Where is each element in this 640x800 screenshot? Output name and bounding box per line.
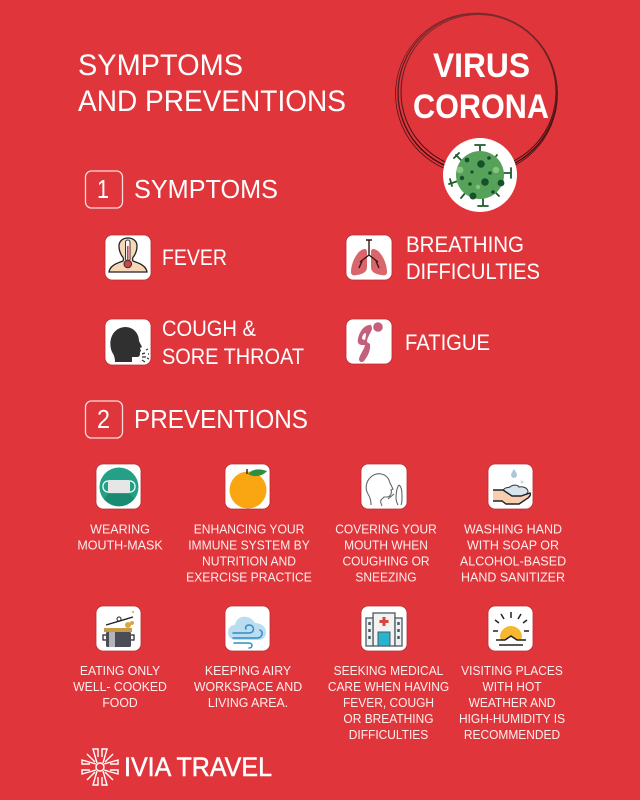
prevention: wash hands: ALCOHOL-BASED bbox=[460, 553, 566, 569]
symptom: fatigue: FATIGUE bbox=[405, 330, 490, 355]
prevention: hot weather: HIGH-HUMIDITY IS bbox=[459, 711, 565, 726]
prevention: hot weather bbox=[459, 606, 565, 742]
title: SYMPTOMS bbox=[78, 49, 243, 82]
symptom: fatigue bbox=[346, 319, 490, 364]
prevention: airy workspace: KEEPING AIRY bbox=[205, 663, 292, 678]
prevention: immune system: NUTRITION AND bbox=[202, 553, 296, 569]
prevention: hot weather: WITH HOT bbox=[482, 679, 542, 694]
prevention: medical care: FEVER, COUGH bbox=[343, 695, 434, 710]
prevention: medical care: SEEKING MEDICAL bbox=[334, 663, 443, 678]
prevention: wash hands bbox=[460, 464, 566, 585]
title bbox=[78, 49, 346, 118]
heading: symptoms: 1 bbox=[97, 174, 109, 204]
icon: washing hands bbox=[488, 464, 533, 509]
badge: virus corona bbox=[396, 13, 558, 212]
symptom: cough and sore throat bbox=[105, 316, 304, 369]
prevention: airy workspace: LIVING AREA. bbox=[208, 695, 288, 710]
icon: sunrise bbox=[488, 606, 533, 651]
prevention: immune system: ENHANCING YOUR bbox=[194, 521, 304, 537]
icon: covering mouth bbox=[361, 464, 407, 509]
prevention: hot weather: VISITING PLACES bbox=[461, 663, 563, 678]
prevention: airy workspace bbox=[194, 606, 302, 710]
symptom: fever: FEVER bbox=[162, 245, 227, 270]
icon: logo flower bbox=[82, 749, 118, 785]
symptom: cough and sore throat: SORE THROAT bbox=[162, 344, 304, 369]
prevention: mouth mask: MOUTH-MASK bbox=[77, 537, 163, 553]
prevention: medical care: CARE WHEN HAVING bbox=[328, 679, 449, 694]
icon: wind cloud bbox=[225, 606, 270, 651]
icon: lungs bbox=[346, 235, 392, 280]
icon: mask bbox=[96, 464, 141, 509]
heading: symptoms: SYMPTOMS bbox=[134, 174, 278, 204]
heading: preventions bbox=[86, 401, 308, 438]
icon: orange bbox=[225, 464, 270, 509]
prevention: wash hands: HAND SANITIZER bbox=[461, 569, 565, 585]
prevention: mouth mask bbox=[77, 464, 163, 553]
prevention: mouth mask: WEARING bbox=[90, 521, 150, 537]
prevention: wash hands: WITH SOAP OR bbox=[467, 537, 559, 553]
heading: preventions: PREVENTIONS bbox=[134, 404, 308, 434]
prevention: medical care bbox=[328, 606, 449, 742]
prevention: airy workspace: WORKSPACE AND bbox=[194, 679, 302, 694]
badge: virus corona: CORONA bbox=[413, 88, 549, 126]
logo: ivia travel: IVIA TRAVEL bbox=[124, 752, 272, 782]
icon: cough bbox=[105, 319, 151, 365]
icon: fatigue bbox=[346, 319, 392, 364]
icon: hospital bbox=[361, 606, 407, 651]
prevention: immune system: EXERCISE PRACTICE bbox=[186, 569, 312, 585]
symptom: breathing difficulties: BREATHING bbox=[406, 232, 524, 257]
prevention: hot weather: RECOMMENDED bbox=[464, 727, 560, 742]
symptom: breathing difficulties bbox=[346, 232, 540, 284]
symptom: cough and sore throat: COUGH & bbox=[162, 316, 256, 341]
badge: virus corona: VIRUS bbox=[433, 47, 530, 85]
prevention: immune system: IMMUNE SYSTEM BY bbox=[188, 537, 310, 553]
symptom: fever bbox=[105, 235, 227, 280]
heading: symptoms bbox=[86, 171, 278, 208]
prevention: cooked food: EATING ONLY bbox=[80, 663, 161, 678]
prevention: cooked food bbox=[73, 606, 167, 710]
prevention: cooked food: FOOD bbox=[102, 695, 138, 710]
icon: fever bbox=[105, 235, 151, 280]
prevention: hot weather: WEATHER AND bbox=[469, 695, 555, 710]
icon: virus bbox=[443, 138, 517, 212]
prevention: cover mouth bbox=[335, 464, 437, 585]
prevention: cover mouth: MOUTH WHEN bbox=[344, 538, 428, 553]
heading: preventions: 2 bbox=[97, 404, 110, 434]
prevention: cover mouth: COUGHING OR bbox=[342, 554, 430, 569]
prevention: medical care: DIFFICULTIES bbox=[349, 727, 428, 742]
logo: ivia travel bbox=[82, 749, 272, 785]
title: AND PREVENTIONS bbox=[78, 85, 346, 118]
prevention: cover mouth: SNEEZING bbox=[355, 570, 417, 585]
prevention: cooked food: WELL- COOKED bbox=[73, 679, 167, 694]
prevention: medical care: OR BREATHING bbox=[343, 711, 434, 726]
icon: cooking pot bbox=[96, 606, 141, 651]
prevention: immune system bbox=[186, 464, 312, 585]
prevention: cover mouth: COVERING YOUR bbox=[335, 522, 437, 537]
symptom: breathing difficulties: DIFFICULTIES bbox=[406, 259, 540, 284]
prevention: wash hands: WASHING HAND bbox=[464, 521, 562, 537]
